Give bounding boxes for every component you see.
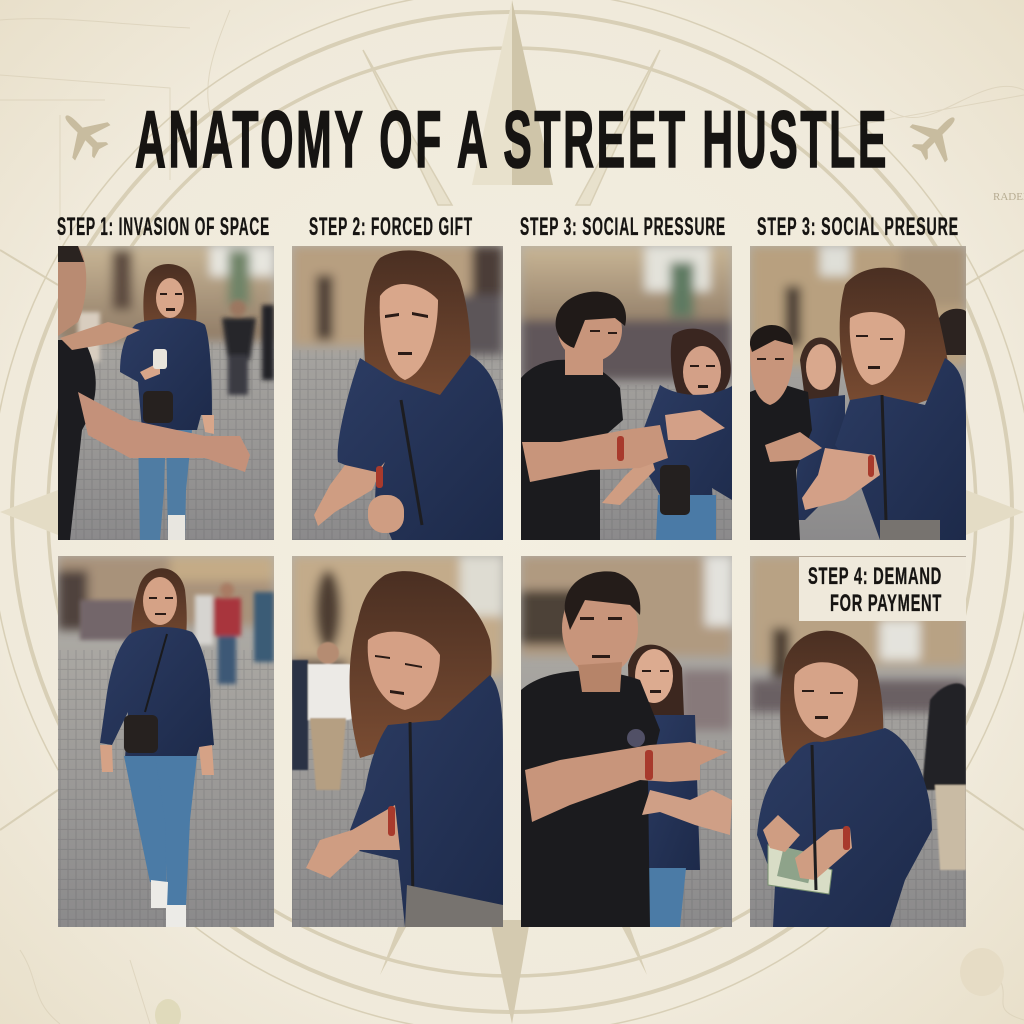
panel: hustler points and demands (521, 556, 732, 927)
panel: woman walking alone (58, 556, 274, 927)
figure: man tying bracelet (521, 292, 725, 540)
figure: woman with coffee cup (120, 264, 214, 540)
caption: step 4 (799, 557, 966, 621)
figure: woman walking (100, 568, 214, 927)
panel: woman looks at bracelet (292, 556, 503, 927)
figure: man pointing (521, 571, 732, 927)
figure: woman counting cash (757, 631, 932, 927)
figure: woman behind (628, 645, 700, 927)
figure: man reaching in (58, 246, 250, 540)
panel: woman approached on the street (58, 246, 274, 540)
figure: friend behind (795, 338, 845, 520)
heading: step 1: STEP 1: INVASION OF SPACE (57, 213, 270, 241)
figure: woman looking at wrist (314, 250, 503, 540)
icon: right airplane (901, 100, 972, 171)
figure: man with phone gesture (750, 325, 822, 540)
panel: victim examines bracelet with crowd (750, 246, 966, 540)
panel: woman holding cash with caption (750, 556, 966, 927)
figure: woman looking down (802, 268, 966, 540)
figure: woman behind (602, 329, 732, 540)
icon: left airplane (48, 98, 119, 169)
panel: hustler grabs wrist (521, 246, 732, 540)
heading: step 3: STEP 3: SOCIAL PRESSURE (520, 213, 726, 241)
figure: woman examining wrist (306, 571, 503, 927)
panel: bracelet tied on wrist (292, 246, 503, 540)
heading: step 2: STEP 2: FORCED GIFT (309, 213, 473, 241)
